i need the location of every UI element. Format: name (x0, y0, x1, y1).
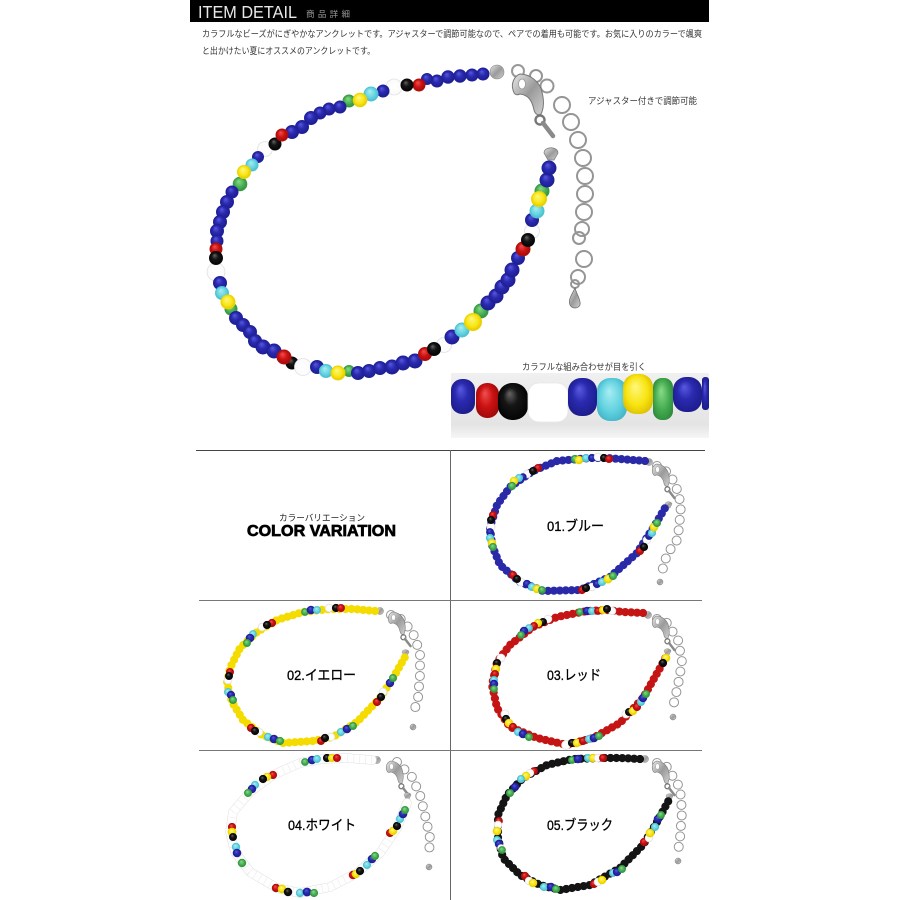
description text (202, 28, 702, 56)
header bar (190, 0, 709, 22)
label: adjuster: アジャスター付きで調節可能 (588, 95, 697, 106)
label 01: 01.ブルー (547, 518, 604, 534)
variant 03 red (490, 606, 682, 749)
main bracelet photo (207, 65, 593, 380)
main bracelet beads (207, 68, 556, 380)
description text: カラフルなビーズがにぎやかなアンクレットです。アジャスターで調節可能なので、ペアでの着用も可能です。お気に入りのカラーで颯爽 (202, 28, 702, 39)
close-up bead photo (451, 373, 709, 438)
label 05: 05.ブラック (547, 817, 613, 833)
main bracelet drop charm (569, 288, 580, 308)
heading: color variation (247, 513, 396, 540)
description text: と出かけたい夏にオススメのアンクレットです。 (202, 45, 375, 56)
main bracelet extender chain (530, 70, 593, 288)
main bracelet clasp (490, 65, 558, 160)
variant 05 black (493, 754, 682, 892)
variant 02 yellow (224, 604, 420, 745)
heading: color variation: カラーバリエーション (279, 513, 365, 523)
label 03: 03.レッド (547, 667, 601, 683)
variation grid lines (196, 450, 705, 900)
heading: color variation: COLOR VARIATION (247, 523, 396, 540)
label 02: 02.イエロー (287, 667, 356, 683)
variant 04 white (228, 754, 432, 897)
close-up caption: カラフルな組み合わせが目を引く (522, 361, 646, 372)
label 04: 04.ホワイト (288, 817, 356, 833)
header subtitle: 商品詳細 (306, 9, 350, 19)
variant 01 blue (486, 453, 681, 594)
header title: ITEM DETAIL (198, 2, 297, 22)
